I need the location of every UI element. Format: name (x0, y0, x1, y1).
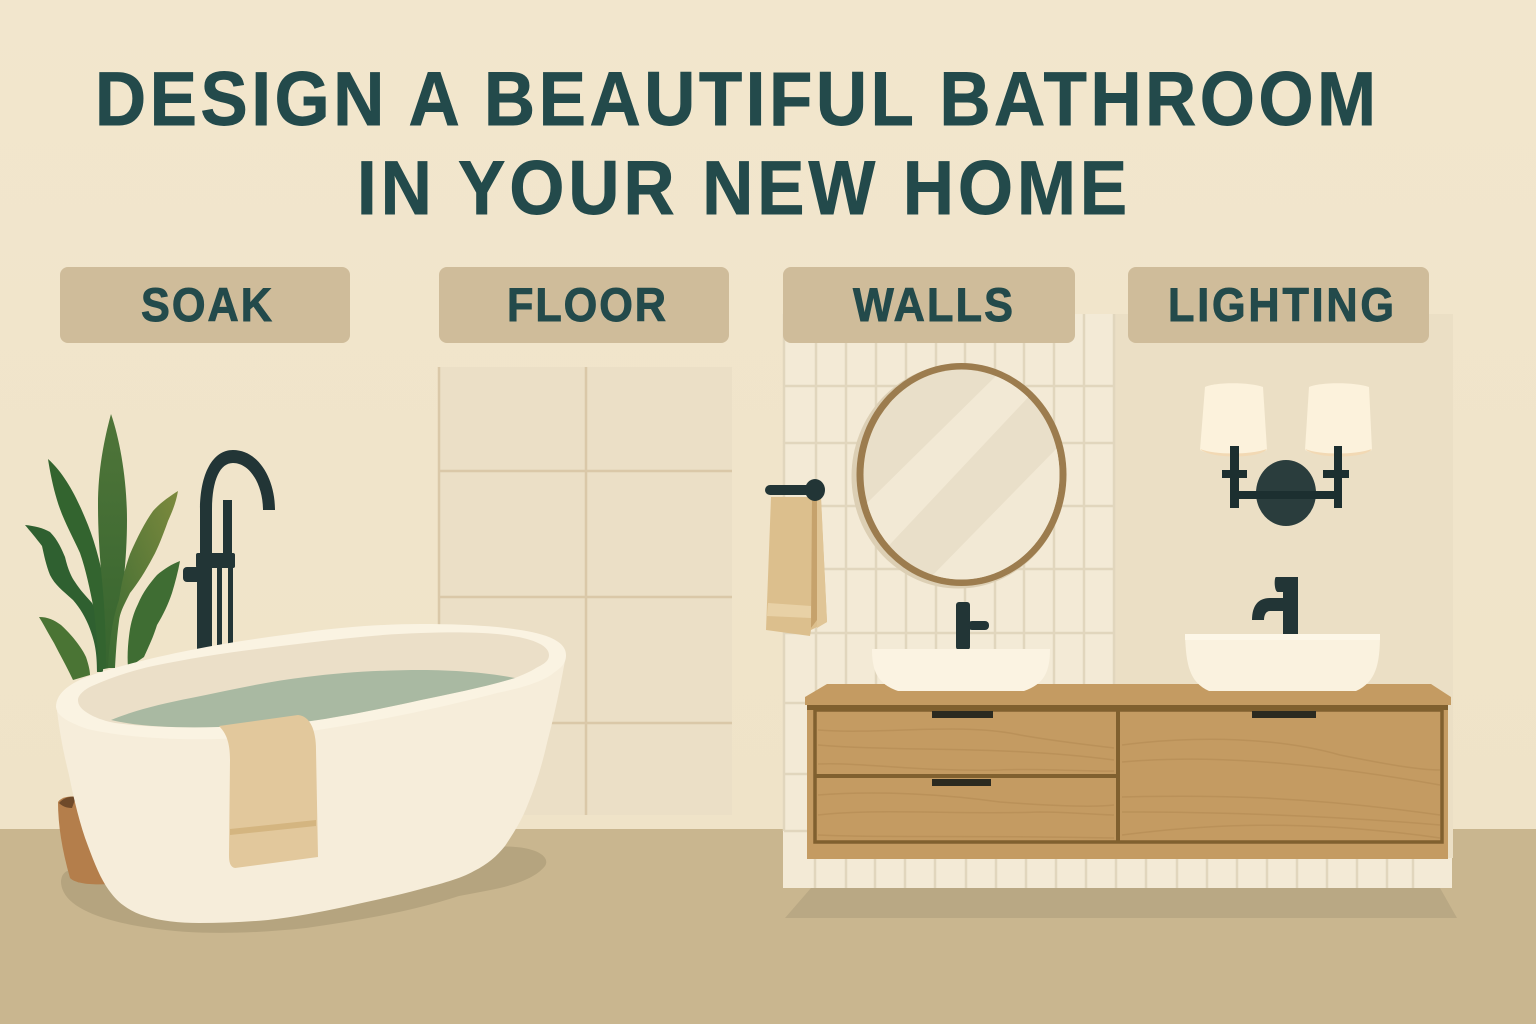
cabinet body (807, 705, 1448, 859)
lighting wall panel (1114, 314, 1453, 858)
left sink (872, 649, 1050, 691)
title (95, 57, 1376, 231)
bath towel (219, 715, 318, 868)
tub inner (78, 632, 549, 727)
right sink faucet (1252, 577, 1298, 634)
pill label: floor (439, 267, 729, 343)
towel and bar (765, 479, 827, 636)
tub body (57, 655, 566, 923)
bathtub (56, 624, 566, 923)
tub rim (56, 624, 566, 739)
pill label: lighting: LIGHTING (1168, 278, 1394, 331)
wall sconce (1200, 383, 1372, 526)
water (111, 670, 515, 727)
leaf: back left (48, 459, 110, 670)
pill label: soak (60, 267, 350, 343)
title: IN YOUR NEW HOME (357, 146, 1127, 231)
floor (0, 829, 1536, 1024)
title: DESIGN A BEAUTIFUL BATHROOM (95, 57, 1376, 142)
mirror (852, 363, 1066, 588)
leaf: low left (39, 617, 90, 680)
vanity shadow (785, 888, 1457, 918)
pill label: lighting (1128, 267, 1429, 343)
cabinet frame (815, 710, 1442, 842)
leaf: far left (25, 525, 103, 672)
right sink (1185, 634, 1380, 691)
pill label: walls (783, 267, 1075, 343)
countertop (805, 684, 1451, 705)
left sink faucet (956, 602, 989, 650)
leaf: center (98, 414, 127, 668)
vanity cabinet (805, 684, 1451, 859)
pill label: walls: WALLS (853, 278, 1013, 331)
drawer handles (932, 711, 1316, 786)
tub shadow (61, 846, 546, 933)
floor tile panel (439, 367, 732, 815)
tub faucet (183, 450, 275, 649)
plant (25, 414, 180, 680)
wood grain (818, 729, 1440, 838)
walls tile panel (783, 314, 1452, 888)
pill label: soak: SOAK (141, 278, 272, 331)
leaf: upper right (108, 491, 178, 668)
plant pot (58, 797, 110, 884)
leaf: lower right (128, 561, 180, 668)
pill label: floor: FLOOR (507, 278, 666, 331)
